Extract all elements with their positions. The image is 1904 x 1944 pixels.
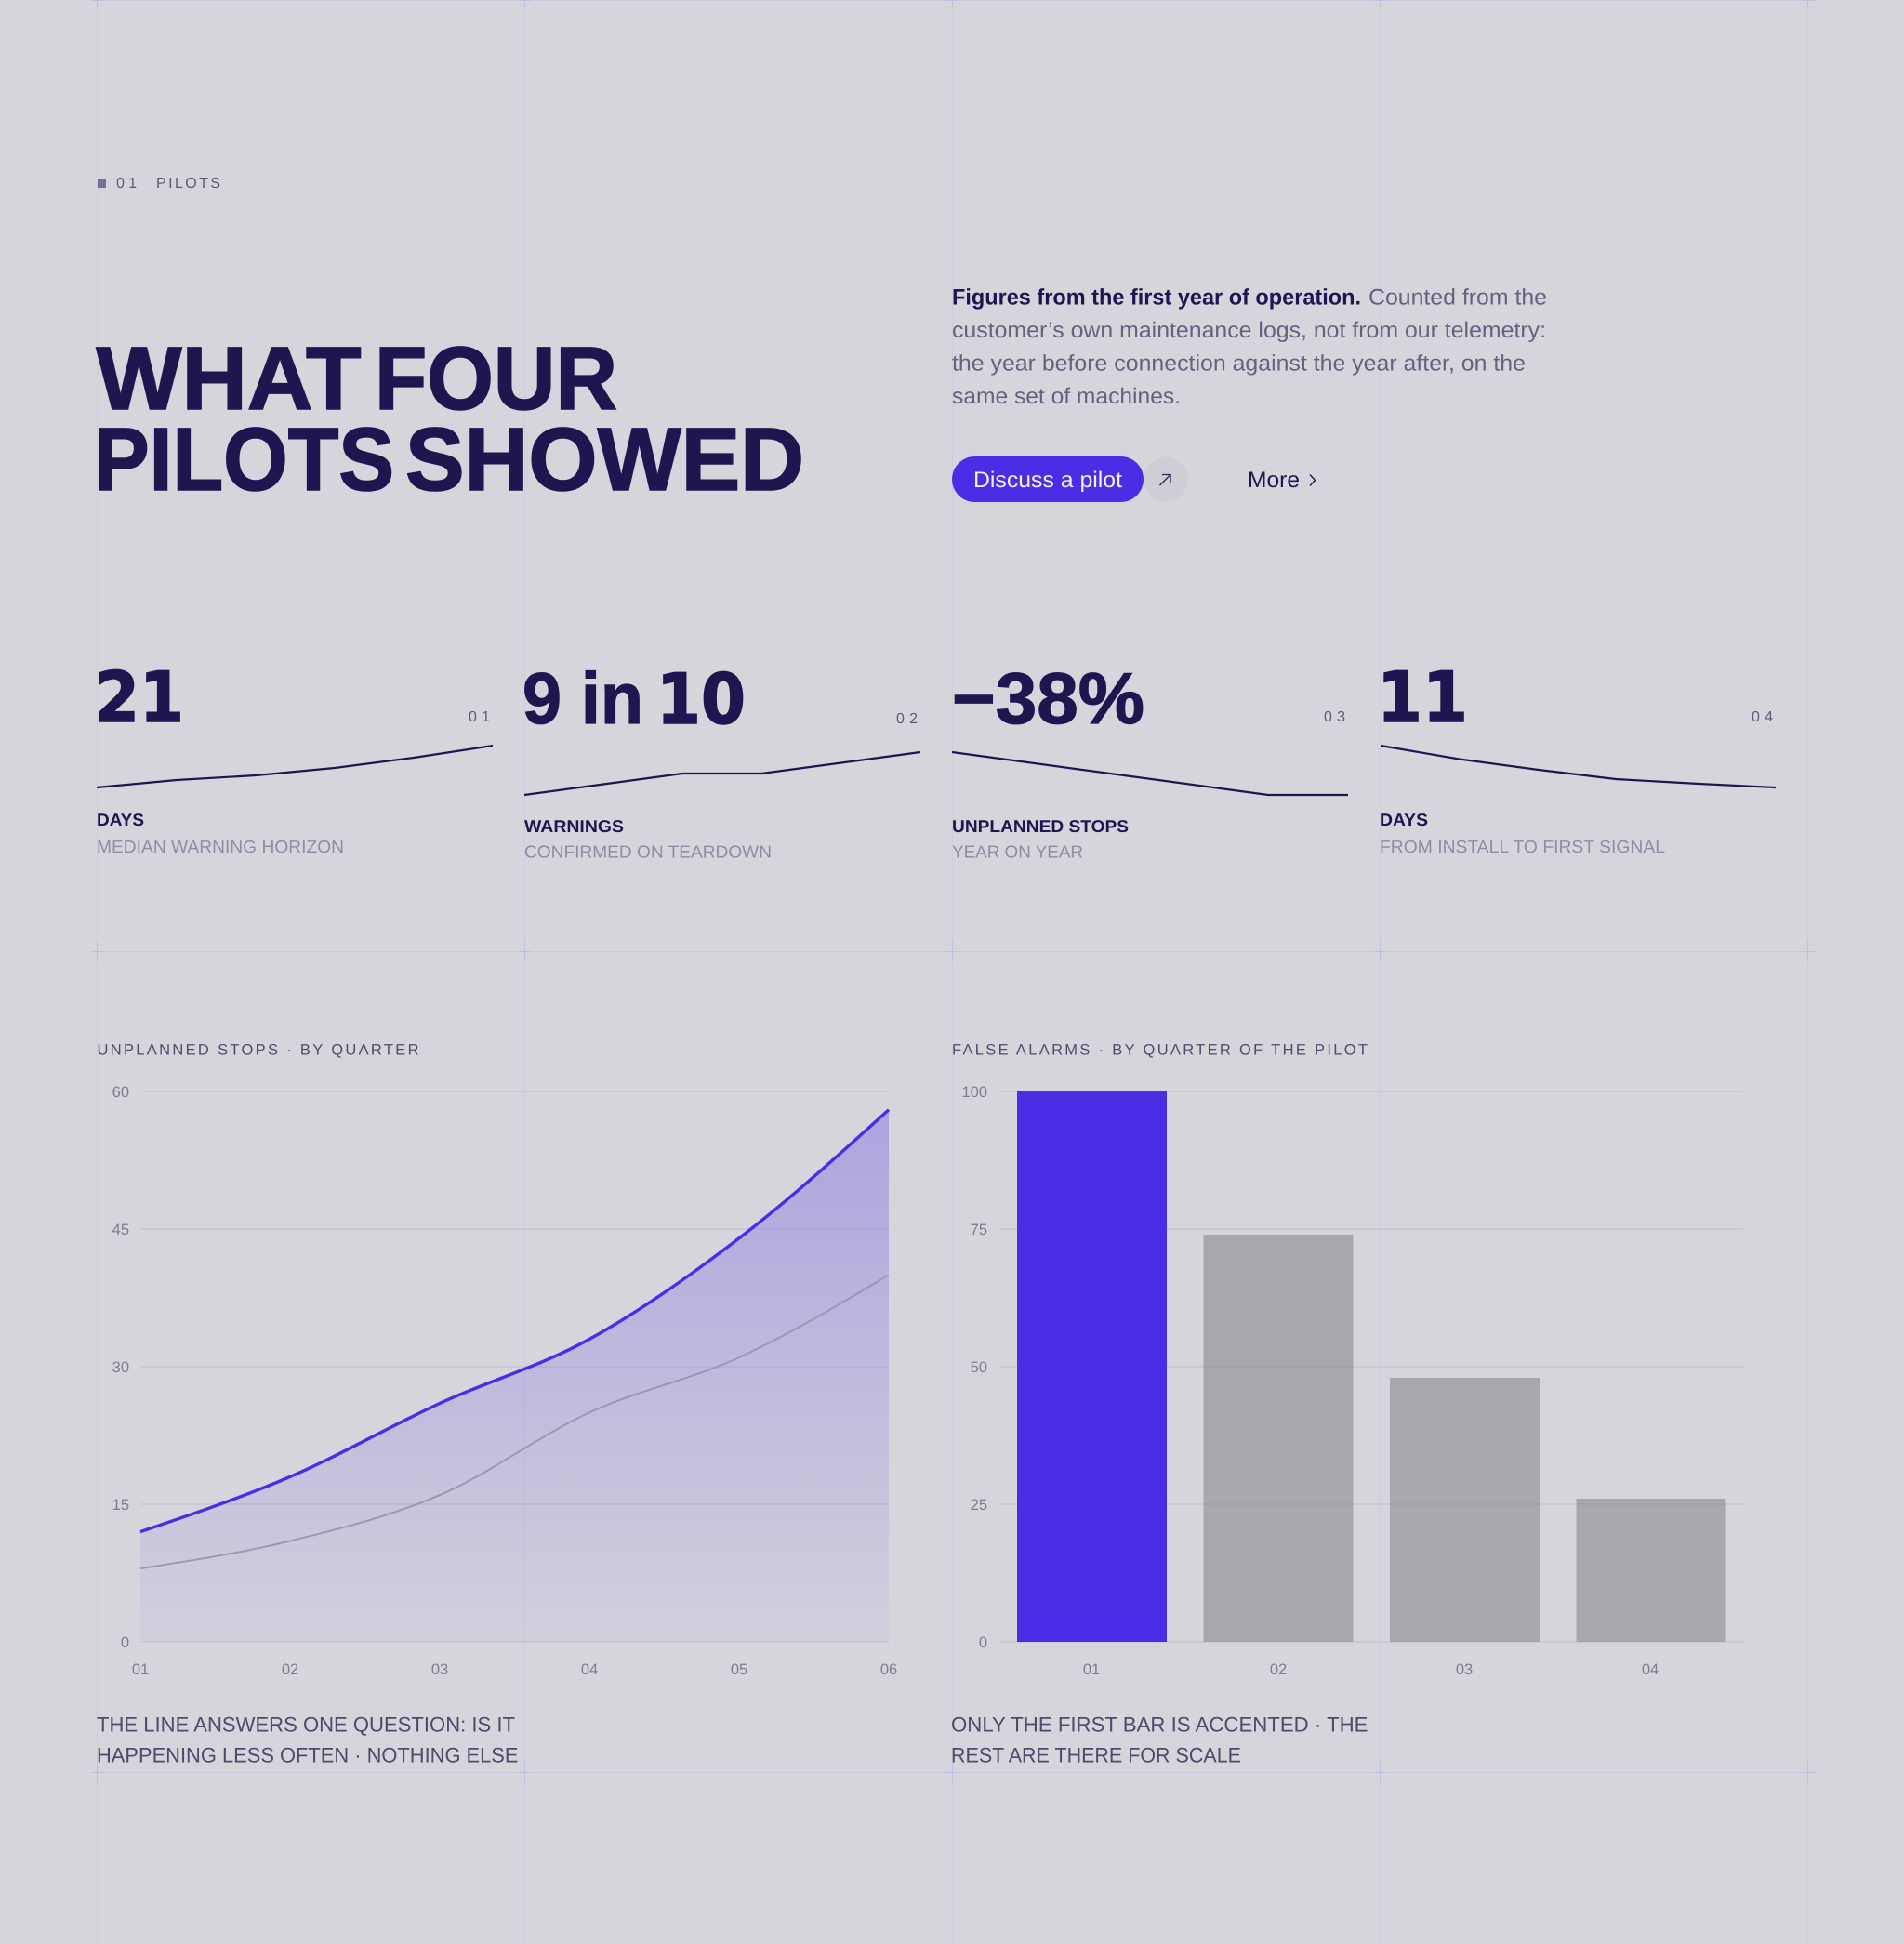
bar chart <box>999 1091 1743 1642</box>
title: SHOWED <box>405 410 804 509</box>
stat 03: minus 38 percent: −38% <box>952 657 1144 739</box>
stat 03: minus 38 percent: UNPLANNED STOPS <box>952 816 1129 836</box>
x axis labels <box>132 1661 897 1678</box>
x axis labels: 06 <box>880 1661 897 1678</box>
y axis labels <box>961 1084 987 1651</box>
intro paragraph: Figures from the first year of operation. <box>952 284 1361 311</box>
y axis labels: 60 <box>112 1084 129 1101</box>
stat 01: 21 days: MEDIAN WARNING HORIZON <box>97 837 344 856</box>
x axis labels: 01 <box>1083 1661 1100 1678</box>
x axis labels: 03 <box>1456 1661 1473 1678</box>
eyebrow: section number and name <box>98 176 220 192</box>
y axis labels: 0 <box>979 1634 987 1651</box>
title: WHAT <box>97 329 361 429</box>
stat 02: 9 in 10 warnings: CONFIRMED ON TEARDOWN <box>524 842 772 861</box>
stat 01: 21 days: 21 <box>95 656 184 738</box>
stat 04: 11 days <box>1377 656 1776 856</box>
title: PILOTS <box>94 410 394 509</box>
caption: HAPPENING LESS OFTEN · NOTHING ELSE <box>97 1744 519 1766</box>
intro paragraph: Counted from the <box>1368 284 1547 311</box>
line chart: grid, area and lines <box>140 1091 889 1642</box>
stat 03: minus 38 percent: 03 <box>1324 709 1345 725</box>
panel: false alarms chart <box>951 1041 1743 1766</box>
y axis labels: 0 <box>121 1634 129 1651</box>
stat 03: minus 38 percent <box>952 657 1348 861</box>
button: discuss a pilot <box>952 456 1144 502</box>
stat 02: 9 in 10 warnings: 9 in <box>522 657 643 739</box>
stat 04: 11 days: 04 <box>1752 709 1773 725</box>
stat 04: 11 days: FROM INSTALL TO FIRST SIGNAL <box>1380 837 1665 856</box>
y axis labels <box>112 1084 129 1651</box>
y axis labels: 25 <box>971 1497 987 1514</box>
icon: arrow in circle <box>1144 457 1188 502</box>
eyebrow: section number and name: PILOTS <box>156 176 220 192</box>
caption: ONLY THE FIRST BAR IS ACCENTED · THE <box>951 1713 1368 1737</box>
x axis labels <box>1083 1661 1659 1678</box>
caption <box>97 1713 519 1766</box>
x axis labels: 04 <box>581 1661 598 1678</box>
intro paragraph: same set of machines. <box>952 384 1181 409</box>
intro paragraph <box>952 284 1547 409</box>
y axis labels: 15 <box>112 1497 129 1514</box>
eyebrow: section number and name: 01 <box>116 176 137 192</box>
panel: unplanned stops chart <box>97 1041 897 1766</box>
caption: REST ARE THERE FOR SCALE <box>951 1744 1241 1766</box>
link: more: More <box>1248 468 1300 493</box>
stat 02: 9 in 10 warnings: 10 <box>656 658 746 740</box>
stat 01: 21 days <box>95 656 493 856</box>
x axis labels: 02 <box>1270 1661 1287 1678</box>
stat 01: 21 days: DAYS <box>97 810 144 829</box>
caption <box>951 1713 1368 1766</box>
y axis labels: 50 <box>971 1359 987 1376</box>
x axis labels: 01 <box>132 1661 149 1678</box>
y axis labels: 100 <box>961 1084 987 1101</box>
x axis labels: 04 <box>1642 1661 1659 1678</box>
stat 01: 21 days: 01 <box>469 709 490 725</box>
stat 03: minus 38 percent: YEAR ON YEAR <box>952 842 1083 861</box>
intro paragraph: the year before connection against the year after, on the <box>952 351 1526 376</box>
x axis labels: 05 <box>731 1661 747 1678</box>
stat 04: 11 days: DAYS <box>1380 810 1428 829</box>
x axis labels: 02 <box>282 1661 298 1678</box>
y axis labels: 45 <box>112 1222 129 1238</box>
stat 04: 11 days: 11 <box>1377 656 1468 738</box>
y axis labels: 75 <box>971 1222 987 1238</box>
heading: unplanned stops: UNPLANNED STOPS · BY QUARTER <box>97 1041 419 1058</box>
button: discuss a pilot: Discuss a pilot <box>973 468 1122 493</box>
caption: THE LINE ANSWERS ONE QUESTION: IS IT <box>97 1713 515 1737</box>
stat 02: 9 in 10 warnings <box>522 657 920 861</box>
title: FOUR <box>375 329 617 429</box>
stat 02: 9 in 10 warnings: 02 <box>896 711 918 727</box>
y axis labels: 30 <box>112 1359 129 1376</box>
heading: false alarms: FALSE ALARMS · BY QUARTER OF THE PILOT <box>952 1041 1368 1058</box>
stat 02: 9 in 10 warnings: WARNINGS <box>524 816 624 836</box>
intro paragraph: customer’s own maintenance logs, not from our telemetry: <box>952 318 1546 343</box>
x axis labels: 03 <box>431 1661 448 1678</box>
title <box>94 329 804 509</box>
